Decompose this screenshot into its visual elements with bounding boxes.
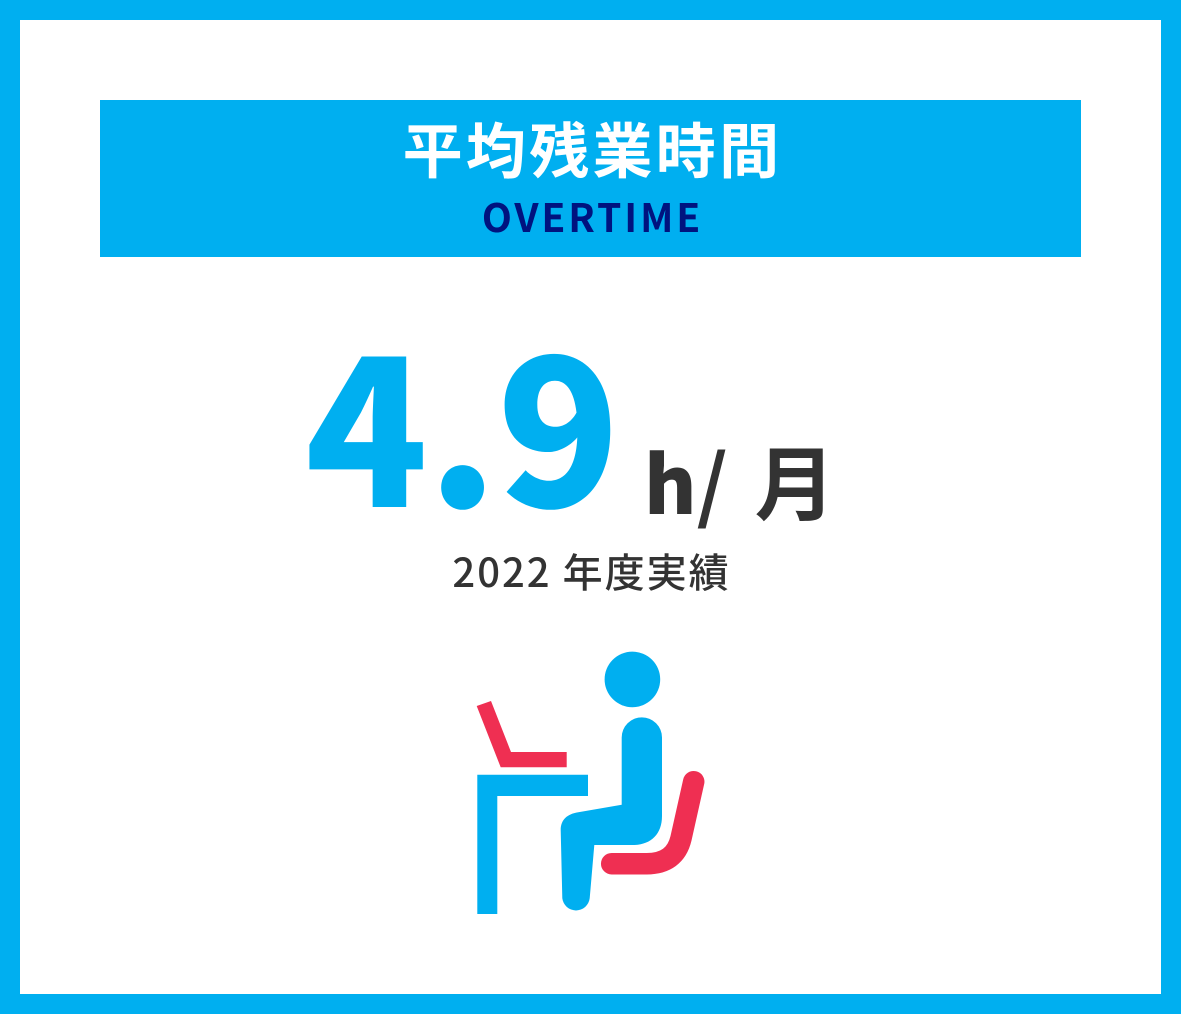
icon: body and leg xyxy=(561,717,662,910)
icon: laptop xyxy=(477,701,567,767)
icon: head xyxy=(605,652,660,707)
caption: fiscal year: 2022 年度実績 xyxy=(452,541,731,599)
metric: 4.9 h/月 xyxy=(305,274,836,566)
heading: OVERTIME: OVERTIME xyxy=(482,188,703,244)
icon: chair xyxy=(612,782,694,864)
icon: desk xyxy=(477,775,588,914)
heading: Japanese title: 平均残業時間 xyxy=(403,104,782,191)
header banner xyxy=(100,100,1081,257)
value 4.9: 4.9 xyxy=(305,274,619,566)
unit h/月: h/ 月 xyxy=(644,421,836,538)
